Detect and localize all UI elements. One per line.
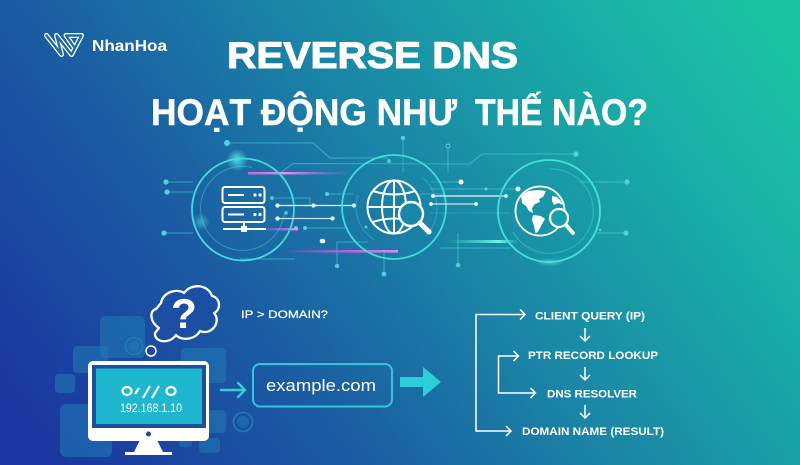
flow step: PTR record lookup: PTR RECORD LOOKUP xyxy=(528,350,658,362)
icon: magnifier xyxy=(399,202,429,232)
circle 3: world with magnifier xyxy=(498,160,600,262)
title line 1: REVERSE DNS xyxy=(227,35,518,76)
flow step: domain name: DOMAIN NAME (RESULT) xyxy=(522,426,664,438)
label: IP > DOMAIN?: IP > DOMAIN? xyxy=(241,309,328,321)
example.com box xyxy=(253,364,392,406)
thought bubble xyxy=(146,346,156,356)
thought cloud with question mark xyxy=(146,286,219,356)
monitor frame xyxy=(88,361,209,441)
icon: NhanHoa mark xyxy=(46,36,82,54)
cloud xyxy=(151,286,219,341)
IP address: 192.168.1.10 xyxy=(120,403,182,415)
domain text: example.com xyxy=(266,376,376,395)
flow connectors xyxy=(476,310,590,436)
arrow: monitor to example.com xyxy=(221,383,245,397)
logo wordmark: NhanHoa xyxy=(92,38,167,55)
flow step: DNS resolver: DNS RESOLVER xyxy=(547,388,637,400)
monitor screen xyxy=(92,365,206,428)
binary glyphs xyxy=(122,386,176,398)
question mark: ? xyxy=(171,290,197,337)
circle 2: globe with magnifier xyxy=(342,155,446,259)
background squares behind monitor xyxy=(55,316,252,457)
title line 2: THẾ NÀO? xyxy=(475,92,648,133)
big arrow xyxy=(400,367,441,397)
icon: server rack xyxy=(222,187,266,232)
logo: NhanHoa xyxy=(46,36,167,55)
monitor stand xyxy=(125,440,172,455)
title line 2: HOẠT ĐỘNG NHƯ xyxy=(151,91,457,133)
icon: small magnifier xyxy=(550,209,573,233)
glow accents xyxy=(192,149,564,266)
title xyxy=(151,35,648,133)
connector lines to circle 3 xyxy=(427,180,520,233)
monitor xyxy=(88,361,209,455)
network diagram xyxy=(161,136,630,276)
flow step: client query: CLIENT QUERY (IP) xyxy=(535,310,645,322)
circuit lines xyxy=(164,138,627,274)
monitor button xyxy=(146,432,151,436)
circuit nodes xyxy=(161,136,630,276)
flow diagram xyxy=(476,310,664,438)
icon: globe xyxy=(368,180,420,234)
pink light streaks xyxy=(248,172,398,253)
icon: earth xyxy=(516,186,564,236)
circle 1: server xyxy=(192,158,294,260)
connector lines between circles xyxy=(276,204,356,243)
